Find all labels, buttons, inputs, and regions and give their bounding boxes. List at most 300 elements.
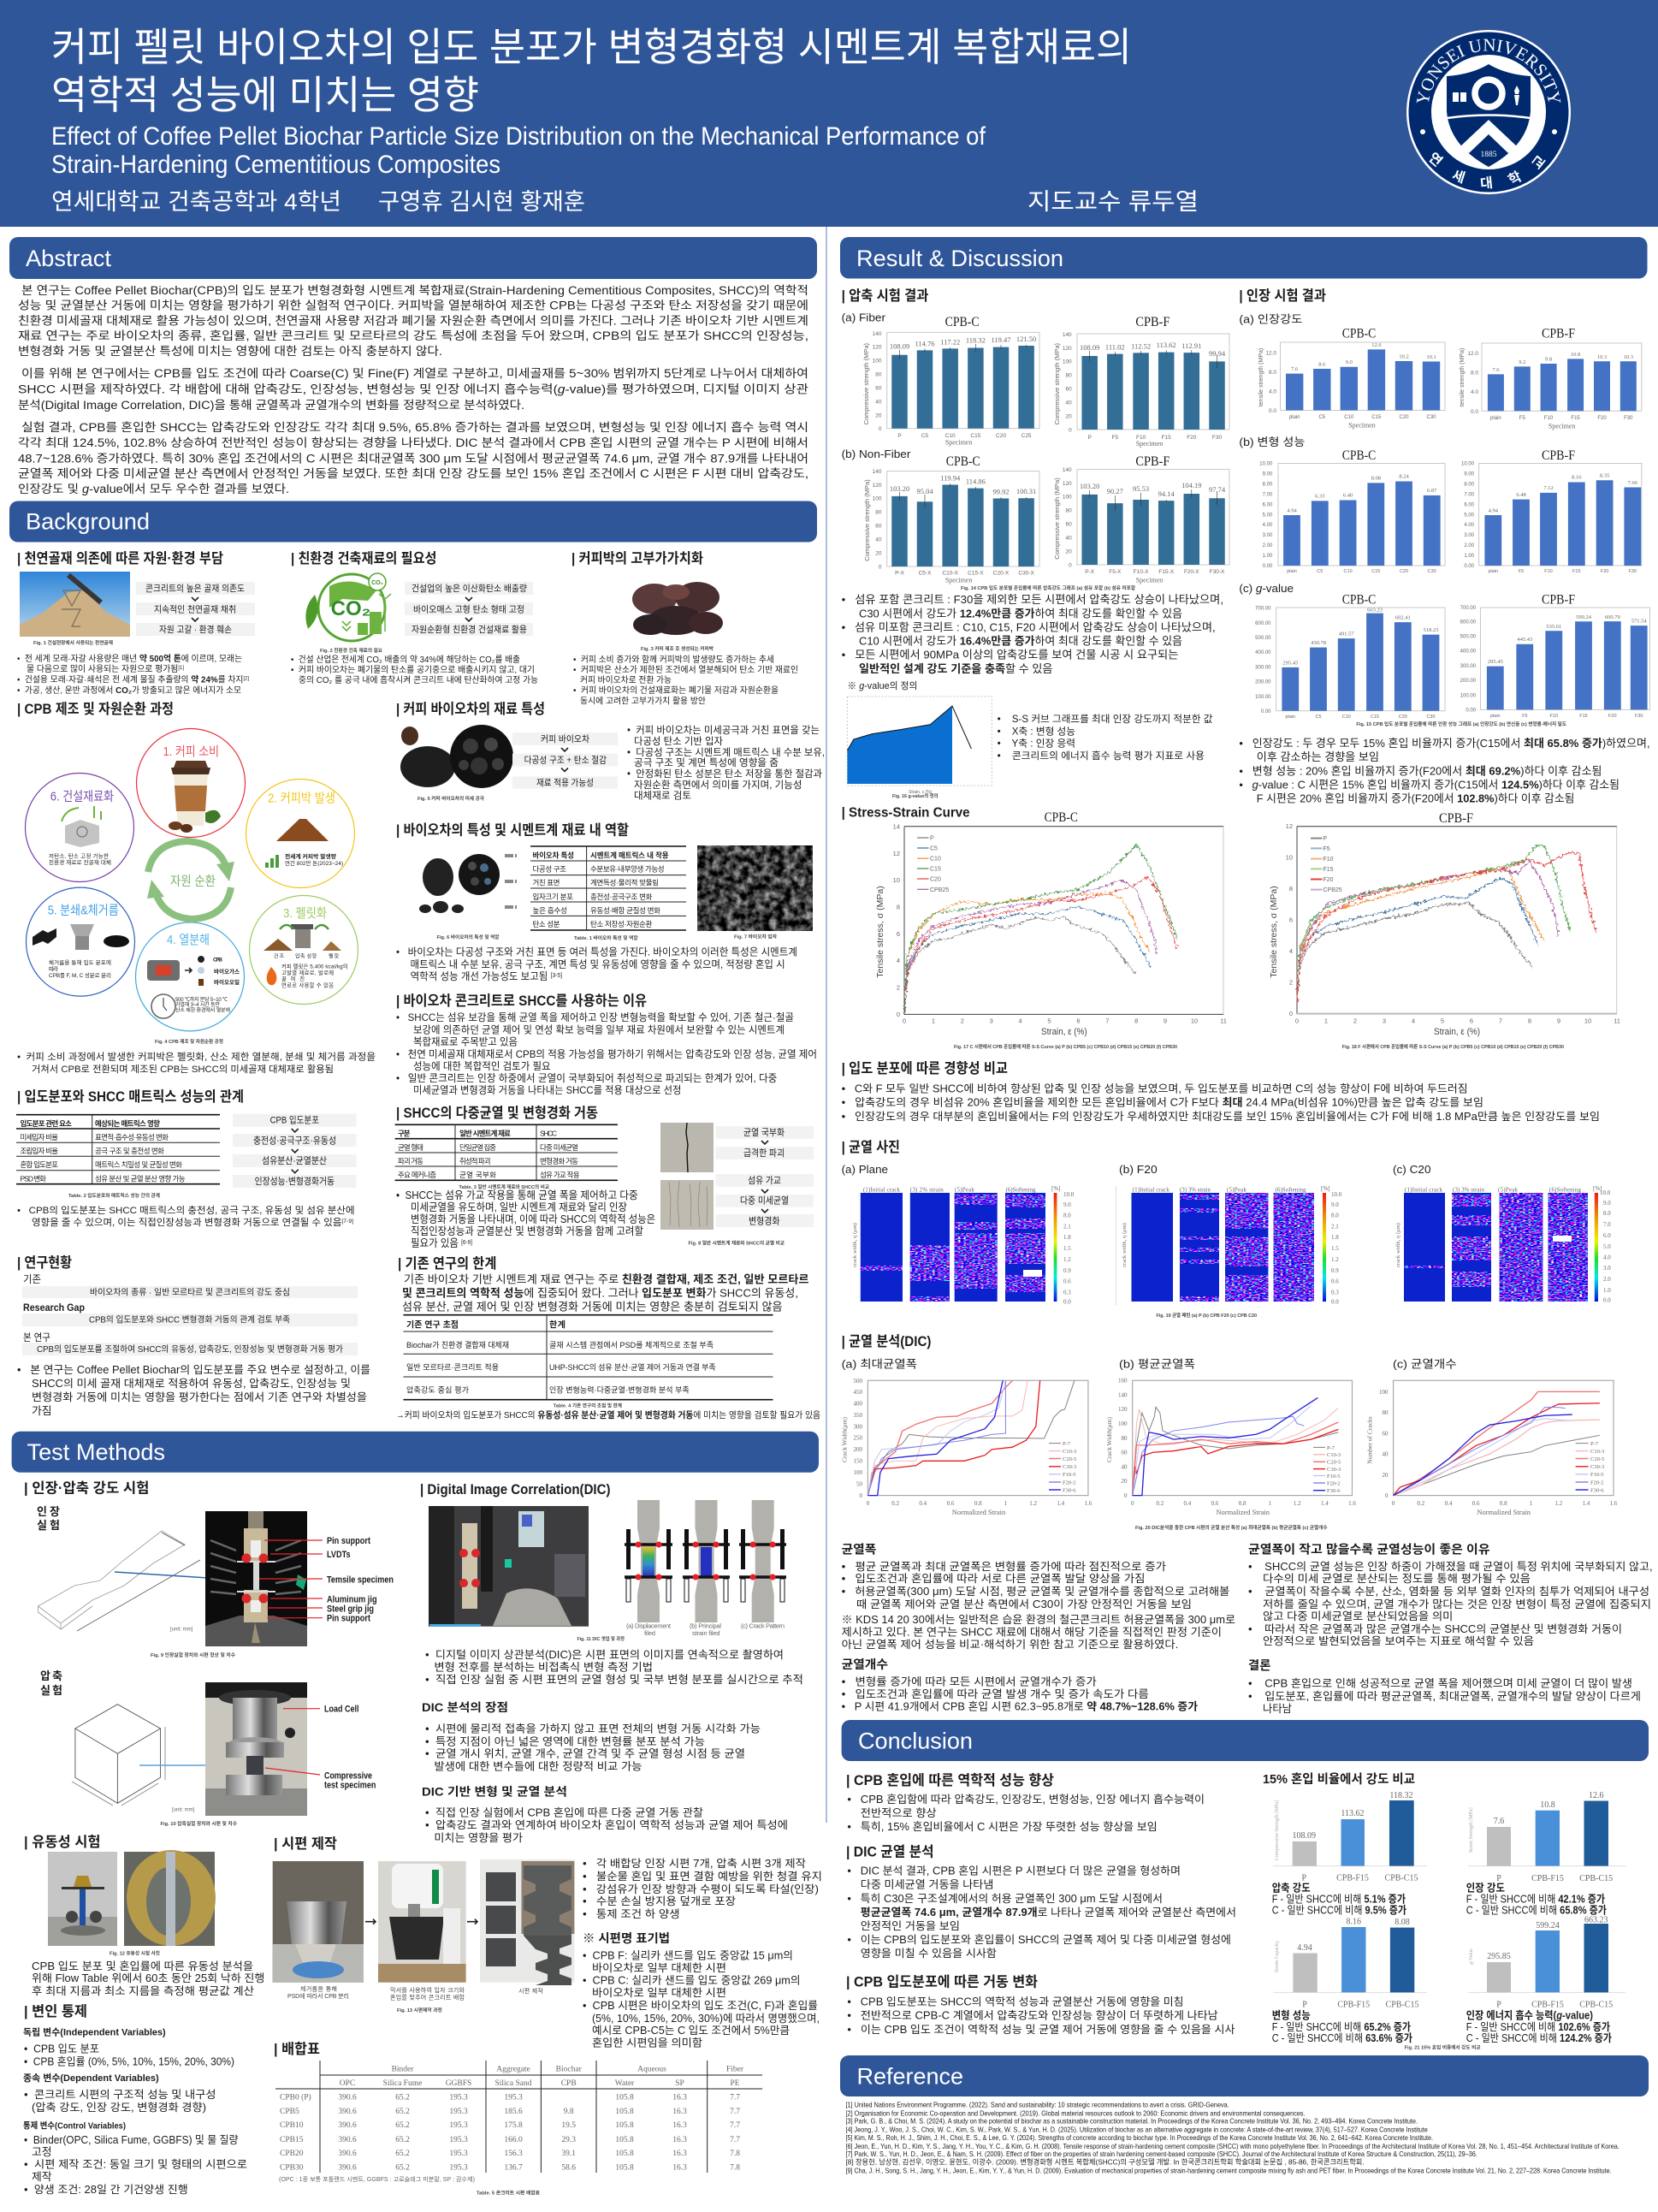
chart: mean crack width: 0.8	[1239, 1500, 1246, 1507]
chart: number of cracks: 0	[1385, 1492, 1389, 1499]
chart: g-value CPB-F: 445.43	[1517, 637, 1532, 643]
table 5: Aggregate	[496, 2066, 530, 2074]
bullets: • C와 F 모두 일반 SHCC에 비하여 향상된 압축 및 인장 성능을 보였으며, 두 입도분포를 비교하면 C의 성능 향상이 F에 비하여 두드러짐	[842, 1083, 1468, 1095]
heading: | 압축 시험 결과	[842, 288, 928, 304]
chart: non-fiber CPB-F: 120	[1063, 481, 1072, 487]
bullets: 변형 전후를 분석하는 비접촉식 변형 측정 기법	[434, 1662, 653, 1674]
panel: mix table	[274, 2041, 762, 2196]
bullets	[396, 1189, 655, 1249]
panel: conclusion text: 영향을 미칠 수 있음을 시사함	[861, 1948, 998, 1960]
chart: g-value CPB-C: 100.00	[1255, 695, 1271, 700]
reference list: [1] United Nations Environment Programme. (2022). Sand and sustainability: 10 strategic recommendations to avert a crisis. GRID-Geneva.	[845, 2101, 1229, 2109]
chart: fiber CPB-C: 108.09	[890, 342, 909, 351]
panel: SHCC multiple cracking	[395, 1105, 814, 1249]
axis ticks: 7	[1105, 1017, 1109, 1025]
chart: fiber CPB-F: 0	[1069, 427, 1072, 433]
table 3: SHCC	[540, 1130, 557, 1138]
chart: g-value CPB-C: 295.45	[1282, 661, 1298, 666]
crack map: F20: (6)Softening	[1275, 1186, 1306, 1193]
chart: tensile: 12.6	[1589, 1791, 1603, 1800]
chart: max crack width: 0	[867, 1500, 870, 1507]
step 6 construction material: 저탄소, 탄소 고정 가능한	[49, 852, 109, 859]
chart: tensile strength CPB-C: C30	[1426, 415, 1436, 420]
panel: conclusion text: | CPB 입도분포에 따른 거동 변화	[846, 1973, 1038, 1990]
title english: Effect of Coffee Pellet Biochar Particle Size Distribution on the Mechanical Performance of	[51, 122, 986, 151]
chart: g-value: g-Value	[1469, 1948, 1474, 1965]
label compression	[40, 1669, 62, 1697]
text block: number of cracks: • 변형률 증가에 따라 모든 시편에서 균열개수가 증가	[842, 1675, 1097, 1687]
step 3 pelletizing: 연료로 사용할 수 있음	[281, 981, 334, 989]
heading: | 입도분포와 SHCC 매트릭스 성능의 관계	[17, 1088, 244, 1105]
panel: natural aggregate dependence	[17, 550, 255, 696]
chart: strain capacity CPB-F: 4.00	[1464, 523, 1475, 528]
chart: g-value CPB-F: 535.61	[1546, 624, 1561, 630]
table 4: Biochar가 친환경 결합재 대체재	[406, 1340, 509, 1349]
chart: fiber CPB-C: 20	[875, 412, 882, 418]
crack map: F20: 1.2	[1331, 1256, 1339, 1263]
panel: compression results: Fig. 14 CPB 입도 분포별 혼입률에 따른 압축강도 그래프 (a) 섬유 포함 (b) 섬유 미포함	[961, 584, 1135, 591]
chart: mean crack width: 100	[1118, 1420, 1128, 1427]
chart: non-fiber CPB-C: CPB-C	[946, 454, 980, 469]
table 5: CPB0 (P)	[280, 2093, 311, 2102]
chart: number of cracks: 20	[1383, 1472, 1389, 1479]
bullets: • 안정화된 탄소 성분은 탄소 저장을 통한 절감과	[627, 768, 822, 780]
abstract text: 본 연구는 Coffee Pellet Biochar(CPB)의 입도 분포가 변형경화형 시멘트계 복합재료(Strain-Hardening Cementitious Composites, SHCC)의 역학적	[21, 284, 808, 297]
chart: fiber CPB-F: 108.09	[1080, 343, 1099, 352]
reference list: [3] Park, G. B., & Choi, M. S. (2024). A study on the potential of biochar as a sustainable construction material. In Proceedings of the Korea Concrete Institute Vol. 36, No. 2, 493–494. Korea Concrete Institute.	[845, 2117, 1418, 2126]
chart: number of cracks: Number of Cracks	[1365, 1416, 1374, 1464]
legend: C10-3	[1327, 1452, 1341, 1458]
panel: coffee grounds upcycling	[571, 550, 798, 707]
chart: strain capacity: 4.94	[1297, 1943, 1312, 1953]
chart: g-value CPB-F: plain	[1490, 714, 1501, 719]
crack map: plane: (5)Peak	[955, 1186, 975, 1193]
photo: compression test setup	[205, 1682, 307, 1816]
bullets: • 커피 소비 증가와 함께 커피박의 발생량도 증가하는 추세	[573, 654, 774, 665]
label tensile: 실험	[37, 1519, 60, 1532]
chart: stress strain CPB-C: CPB-C	[1045, 810, 1078, 825]
chart: stress strain CPB-F: CPB-F	[1439, 811, 1473, 826]
authors: 구영휴 김시현 황재훈	[378, 189, 585, 215]
chart: tensile: 10.8	[1540, 1800, 1555, 1810]
label tensile: 인장	[37, 1505, 60, 1518]
header banner	[0, 0, 1658, 227]
table 5: 105.8	[615, 2163, 634, 2172]
chart: strain capacity CPB-C: 6.40	[1343, 493, 1353, 498]
bullets: 공극 구조 및 계면 특성에 영향을 줌	[634, 757, 779, 768]
chart: max crack width	[840, 1378, 1093, 1516]
chart: strain capacity CPB-F: F15	[1572, 569, 1581, 574]
bullets	[17, 1205, 355, 1228]
table 1: 높은 흡수성	[532, 906, 567, 915]
panel: research status: CPB의 입도분포를 조절하여 SHCC의 유동성, 압축강도, 인장성능 및 변형경화 거동 평가	[37, 1343, 343, 1355]
crack map: F20: 2.1	[1331, 1224, 1339, 1231]
axis ticks: 7	[1499, 1017, 1502, 1025]
chart: fiber CPB-C: CPB-C	[945, 315, 980, 329]
panel: conclusion text: 전반적으로 향상	[861, 1807, 937, 1819]
chart: strain capacity CPB-F	[1461, 448, 1642, 574]
bullets: • 압축강도의 경우 비섬유 20% 혼입비율을 제외한 모든 혼입비율에서 C가 F보다 최대 24.4 MPa(비섬유 10%)만큼 높은 압축 강도를 보임	[842, 1097, 1483, 1109]
bullets: • 불순물 혼입 및 표면 결함 예방을 위한 청결 유지	[583, 1871, 822, 1883]
chart: mean crack width: 1	[1268, 1500, 1271, 1507]
chart: fiber CPB-C: Compressive strength (MPa)	[862, 342, 870, 424]
axis ticks	[1286, 822, 1620, 1025]
chart: strain capacity CPB-F: F5	[1519, 569, 1524, 574]
chart: strain capacity CPB-F: 0.00	[1464, 564, 1475, 569]
reference list: [8] 장용헌, 남상현, 김선우, 이영오, 윤현도, 이광수. (2009). 변형경화형 시멘트 복합체(SHCC)의 구성모델 개발. In 한국콘크리트학회 학술대회 논문집 , 85-86, 한국콘크리트학회.	[845, 2158, 1365, 2167]
crack map: C20: (6)Softening	[1549, 1186, 1581, 1193]
chart: g-value CPB-C: 491.57	[1339, 632, 1354, 637]
bullets: 자원순환 측면에서 의미를 가지며, 기능성	[634, 779, 802, 791]
chart: tensile: Strain Strength [MPa]	[1469, 1807, 1474, 1853]
axis ticks: 0	[1295, 1017, 1299, 1025]
table 5: Binder	[392, 2066, 414, 2074]
crack map: C20: (1)Initial crack	[1405, 1186, 1442, 1193]
panel: conclusion text: • 이는 CPB 입도 조건이 역학적 성능 및 균열 제어 거동에 영향을 줄 수 있음을 시사	[847, 2024, 1235, 2036]
table 5	[275, 2061, 762, 2173]
crack map: C20: 2.0	[1603, 1276, 1611, 1283]
chart: non-fiber CPB-C: 100	[873, 496, 882, 502]
chart: strain capacity CPB-C: 6.00	[1263, 502, 1273, 507]
chart: strain capacity CPB-C: 8.08	[1371, 476, 1381, 481]
crack map: F20	[1116, 1185, 1342, 1306]
text block: number of cracks: • P 시편 41.9개에서 CPB 혼입 시편 62.3~95.8개로 약 48.7%~128.6% 증가	[842, 1699, 1199, 1713]
panel: compression results: (a) Fiber	[842, 311, 886, 323]
bullets	[291, 654, 538, 685]
icon: green CO2 globe	[305, 573, 391, 641]
chart: non-fiber CPB-C: 80	[875, 510, 882, 516]
crack map: plane: 8.0	[1063, 1212, 1071, 1219]
flow chart: CPB 입도분포	[270, 1114, 319, 1126]
abstract text: 48.7~128.6% 증가하였다. 특히 30% 혼입 조건에서의 C 시편은 최대균열폭 300 μm 도달 시점에서 평균균열폭 74.6 μm, 균열 개수 87.9개를 나타내어	[18, 452, 808, 466]
legend: C10-3	[1063, 1449, 1076, 1455]
text: compression: C - 일반 SHCC에 비해 9.5% 증가	[1272, 1903, 1406, 1917]
heading: | 바이오차 콘크리트로 SHCC를 사용하는 이유	[396, 993, 647, 1009]
bullets: 미세균열을 유도하며, 일반 시멘트계 재료와 달리 인장	[411, 1201, 627, 1213]
flow chart	[512, 732, 618, 789]
panel: conclusion text: 평균균열폭 74.6 μm, 균열개수 87.9개 로 나타나 균열폭 제어와 균열분산 측면에서	[861, 1906, 1236, 1918]
chart: fiber CPB-F: F30	[1212, 435, 1222, 441]
chart: fiber CPB-F: 60	[1065, 387, 1072, 392]
chart: mean crack width: 0	[1131, 1500, 1134, 1507]
chart: tensile strength CPB-C: CPB-C	[1342, 327, 1376, 341]
text block: crack width: • 허용균열폭(300 μm) 도달 시점, 평균 균열폭 및 균열개수를 종합적으로 고려해볼	[842, 1586, 1229, 1598]
step 4 pyrolysis: 바이오가스	[214, 967, 240, 976]
tensile callouts: Pin support	[327, 1536, 370, 1546]
tensile callouts: LVDTs	[327, 1550, 351, 1560]
tensile callouts: Steel grip jig	[327, 1604, 374, 1615]
chart: number of cracks: 0.4	[1445, 1500, 1453, 1507]
panel: tension and compression test	[24, 1480, 394, 1827]
bullets: • 수분 손실 방지용 덮개로 포장	[583, 1895, 737, 1907]
chart: strain capacity CPB-C: 4.00	[1263, 523, 1273, 528]
heading: | SHCC의 다중균열 및 변형경화 거동	[396, 1105, 598, 1121]
text block: crack width: ※ KDS 14 20 30에서는 일반적은 습윤 환경의 철근콘크리트 허용균열폭을 300 μm로	[842, 1614, 1235, 1626]
chart: tensile strength CPB-F	[1460, 327, 1642, 430]
chart: fiber CPB-C: 118.32	[966, 335, 986, 344]
panel: biochar role: Table. 1 바이오차 특성 및 역할	[574, 934, 638, 941]
table 5: 58.6	[561, 2163, 576, 2172]
crack map: plane: [%]	[1051, 1185, 1061, 1192]
step 5 grinding	[26, 887, 135, 996]
panel: coffee grounds upcycling: Fig. 3 커피 제조 후 생성되는 커피박	[641, 645, 714, 652]
bullets: • SHCC는 섬유 보강을 통해 균열 폭을 제어하고 인장 변형능력을 확보할 수 있어, 기존 철근·철골	[396, 1011, 794, 1023]
chart: max crack width: 500	[854, 1378, 862, 1385]
chart: g-value: P	[1496, 2001, 1501, 2009]
chart: max crack width: 400	[854, 1400, 862, 1407]
chart: compression: P	[1302, 1874, 1307, 1883]
reference list: [5] Kim, M. S., Roh, H. J., Shim, J. H., Choi, E. S., & Lee, G. Y. (2024). Strengths of concrete according to biochar type. In Proceedings of the Korea Concrete Institute Vol. 36, No. 2, 641–642. Korea Concrete Institute.	[845, 2133, 1433, 2142]
chart: number of cracks: 1.4	[1583, 1500, 1590, 1507]
chart: tensile strength CPB-C: 9.0	[1346, 359, 1353, 365]
step 5 grinding: 따라	[49, 965, 58, 972]
chart: max crack width: Crack Width(μm)	[840, 1417, 849, 1462]
crack map: C20: [%]	[1593, 1185, 1602, 1192]
step 1 coffee consumption: 1. 커피 소비	[163, 744, 219, 759]
chart: strain capacity CPB-C: 10.00	[1259, 462, 1273, 467]
chart: fiber CPB-F: 112.52	[1131, 341, 1151, 350]
chart: g-value CPB-F: F10	[1550, 714, 1558, 719]
chart: fiber CPB-C	[862, 315, 1039, 447]
panel: biochar material properties	[396, 701, 825, 802]
chart: mean crack width	[1105, 1378, 1356, 1516]
chart: max crack width: 1.2	[1029, 1500, 1037, 1507]
panel: variable control: 통제 변수(Control Variables)	[23, 2120, 126, 2131]
table 1: 충전성·공극구조 변화	[590, 893, 653, 901]
panel: variable control: • 시편 제작 조건: 동일 크기 및 형태의 시편으로	[24, 2158, 247, 2170]
chart: max crack width: 450	[854, 1389, 862, 1396]
bullets: 매트릭스 내 수분 보유, 공극 구조, 계면 특성 및 유동성에 영향을 줄 수 있으며, 적정량 혼입 시	[411, 958, 785, 970]
panel: crack photos: Fig. 19 균열 패턴 (a) P (b) CPB F20 (c) CPB C20	[1157, 1312, 1257, 1319]
chart: mean crack width: 0	[1124, 1492, 1128, 1499]
chart: max crack width: 0.6	[947, 1500, 955, 1507]
abstract text	[18, 284, 808, 495]
step 3 pelletizing	[250, 895, 358, 1005]
panel: 15 percent comparison	[1263, 1772, 1625, 2050]
chart: strain capacity: Strain Capacity	[1275, 1941, 1280, 1972]
panel: limits of prior research: Table. 4 기존 연구의 초점 및 한계	[554, 1402, 622, 1408]
heading: | 연구현황	[17, 1254, 72, 1271]
chart: stress strain CPB-C: Tensile stress, σ (MPa)	[875, 886, 885, 978]
table 2: 매트릭스 치밀성 및 균질성 변화	[95, 1160, 182, 1169]
axis ticks: 6	[1470, 1017, 1473, 1025]
panel: crack analysis DIC	[840, 1333, 1618, 1531]
bullets: SHCC의 미세 골재 대체재로 적용하여 유동성, 압축강도, 인장성능 및	[32, 1378, 351, 1390]
abstract text: 인장강도 및 g-value에서 모두 우수한 결과를 보였다.	[18, 483, 289, 495]
photo captions: 시편 제작	[518, 1987, 544, 1995]
table 5: 7.8	[730, 2150, 740, 2158]
table 1: 다공성 구조	[532, 865, 566, 874]
chart: compression: 108.09	[1293, 1831, 1316, 1841]
panel: limits of prior research	[396, 1255, 820, 1420]
text block: why small cracks are better: 균열폭이 작고 많을수록 균열성능이 좋은 이유	[1248, 1542, 1490, 1556]
panel: flow test: Fig. 12 유동성 시험 사진	[110, 1949, 160, 1956]
chart: fiber CPB-C: 80	[875, 371, 882, 378]
chart: tensile strength CPB-F: F5	[1519, 416, 1525, 421]
heading: | 바이오차의 특성 및 시멘트계 재료 내 역할	[396, 821, 629, 839]
text block: crack conclusion: • CPB 혼입으로 인해 성공적으로 균열 폭을 제어했으며 미세 균열이 더 많이 발생	[1248, 1677, 1632, 1689]
section bar: Conclusion	[842, 1720, 1649, 1761]
table 3: 섬유 가교 작용	[540, 1171, 580, 1179]
chart: tensile: CPB-C15	[1579, 1874, 1613, 1883]
flow chart: 지속적인 천연골재 채취	[154, 604, 236, 614]
section bar: Result and Discussion	[840, 237, 1648, 279]
axis ticks: 4	[897, 957, 900, 964]
bullets: C10 시편에서 강도가 16.4%만큼 증가하여 최대 강도를 확인할 수 있음	[859, 635, 1182, 647]
panel: crack photos	[842, 1139, 1611, 1319]
chart: strain capacity CPB-C: 0.00	[1263, 564, 1273, 569]
chart: fiber CPB-C: 120	[873, 345, 882, 351]
text block: number of cracks: • 입도조건과 혼입률에 따라 균열 발생 개수 및 증가 속도가 다름	[842, 1688, 1149, 1700]
chart: max crack width: Normalized Strain	[952, 1508, 1006, 1516]
chart: fiber CPB-C: C10	[945, 433, 956, 439]
table 5: 19.5	[561, 2121, 576, 2130]
panel: conclusion text: • 특히, 15% 혼입비율에서 C 시편은 가장 뚜렷한 성능 향상을 보임	[847, 1821, 1158, 1833]
bullets naming: 바이오차로 일부 대체한 시편	[592, 1962, 726, 1974]
flow chart: 다중 미세균열	[740, 1195, 789, 1207]
chart: g-value CPB-C: CPB-C	[1342, 592, 1376, 608]
chart: strain capacity: CPB-F15	[1337, 2001, 1370, 2009]
bullets	[842, 593, 1223, 675]
text: tensile	[1466, 1883, 1607, 1917]
text block: CPB 입도 분포 및 혼입률에 따른 유동성 분석을	[32, 1960, 253, 1972]
chart: tensile strength CPB-C: C5	[1318, 415, 1326, 420]
chart: g-value area	[847, 697, 992, 799]
chart: non-fiber CPB-F	[1053, 454, 1229, 584]
flow chart: 커피 바이오차	[541, 734, 589, 744]
text: energy absorption	[1466, 2009, 1612, 2044]
tensile callouts: Pin support	[327, 1614, 370, 1624]
tensile callouts: Temsile specimen	[327, 1574, 394, 1585]
chart: tensile strength CPB-C: 12.6	[1371, 342, 1382, 348]
table 5: CPB20	[280, 2150, 304, 2158]
heading: | 커피박의 고부가가치화	[571, 550, 703, 566]
photo: sand mound	[20, 572, 130, 637]
crack map: C20	[1395, 1185, 1611, 1304]
table 5: 390.6	[338, 2108, 357, 2116]
section bar: Conclusion: Conclusion	[858, 1729, 973, 1754]
table 5: 136.7	[504, 2163, 523, 2172]
bullets: [6-9]	[461, 1240, 472, 1246]
chart: tensile strength CPB-C: 8.6	[1318, 361, 1326, 368]
legend: C30-3	[1590, 1464, 1604, 1470]
reference list	[845, 2101, 1620, 2175]
chart: g-value CPB-F	[1460, 592, 1649, 719]
panel: research status: 본 연구	[23, 1331, 50, 1343]
chart: mean crack width: 160	[1118, 1378, 1128, 1385]
bullets: 대체재로 검토	[634, 791, 691, 802]
table 5: 166.0	[504, 2136, 523, 2144]
flow chart: 건설업의 높은 이산화탄소 배출량	[412, 583, 527, 594]
text: strain capacity: C - 일반 SHCC에 비해 63.6% 증가	[1272, 2031, 1412, 2044]
chart: mean crack width: 0.6	[1211, 1500, 1219, 1507]
legend: P-7	[1590, 1441, 1599, 1447]
panel: specimen fabrication: Fig. 13 시편제작 과정	[397, 2007, 442, 2013]
section bar: Test Methods: Test Methods	[27, 1439, 165, 1465]
legend: C20	[930, 876, 941, 883]
bullets: 다공성 탄소 기반 입자	[634, 736, 723, 747]
chart: non-fiber CPB-C: 140	[873, 469, 882, 475]
chart: g-value CPB-C: C10	[1342, 715, 1351, 720]
step 6 construction material: 친환경 재료로 잔골재 대체	[49, 858, 111, 866]
bullets	[998, 714, 1213, 762]
chart: g-value CPB-F: F5	[1522, 714, 1528, 719]
table 5: 16.3	[672, 2121, 687, 2130]
table 4: 압축강도 중심 평가	[406, 1385, 469, 1394]
step 4 pyrolysis: 바이오오일	[214, 978, 240, 986]
bullets: 복합재료로 주목받고 있음	[413, 1035, 518, 1047]
table 5: CPB15	[280, 2136, 304, 2144]
legend: C30-3	[1327, 1467, 1341, 1473]
bullets: • 커피 바이오차의 건설재료화는 폐기물 저감과 자원순환을	[573, 685, 779, 696]
panel: research status: Research Gap	[23, 1302, 85, 1314]
panel: biochar role: Fig. 7 바이오차 입자	[734, 933, 777, 940]
text block	[402, 1273, 809, 1313]
chart: strain capacity CPB-C: 6.87	[1427, 488, 1437, 494]
table 2: 표면적·흡수성·유동성 변화	[95, 1133, 169, 1142]
bullets: 변형경화 거동을 나타내며, 이에 따라 SHCC의 역학적 성능은	[411, 1213, 655, 1225]
crack map: F20: 10.0	[1331, 1191, 1342, 1198]
axis ticks: 4	[1289, 947, 1293, 955]
table 2: 미세입자 비율	[21, 1133, 58, 1142]
chart: non-fiber CPB-C: 114.86	[966, 477, 986, 486]
crack map: plane: 2.1	[1063, 1224, 1071, 1231]
label tensile	[37, 1505, 60, 1532]
chart: max crack width: 0	[859, 1492, 862, 1499]
legend	[1576, 1441, 1604, 1494]
subheading: DIC 분석의 장점	[422, 1701, 508, 1714]
legend: F20-2	[1063, 1480, 1076, 1486]
heading: | Stress-Strain Curve	[842, 806, 970, 820]
chart: g-value CPB-F: CPB-F	[1542, 592, 1575, 608]
panel: eco-friendly materials: Fig. 2 친환경 건축 재료의 필요	[320, 647, 382, 654]
legend: P-7	[1063, 1441, 1071, 1447]
panel: tension and compression test: Fig. 9 인장실험 장치와 시편 형상 및 치수	[151, 1652, 235, 1658]
axis ticks: 1	[932, 1017, 935, 1025]
chart: max crack width: 0.4	[919, 1500, 927, 1507]
chart: non-fiber CPB-C: 119.94	[940, 474, 961, 483]
chart: strain capacity: P	[1302, 2001, 1307, 2009]
axis ticks: 1	[1324, 1017, 1328, 1025]
text block: crack width: 아닌 균열폭 제어 성능을 비교·해석하기 위한 참고 기준으로 활용하였다.	[842, 1639, 1178, 1651]
table 5: 195.3	[504, 2093, 523, 2102]
chart: fiber CPB-C: 119.47	[991, 335, 1011, 344]
bullets: • 통제 조건 하 양생	[583, 1908, 680, 1920]
chart: stress strain CPB-C	[875, 810, 1227, 1037]
step 2 coffee grounds	[246, 779, 354, 888]
chart: g-value CPB-F: 295.45	[1488, 659, 1503, 665]
bullets	[425, 1723, 761, 1773]
panel: flow test	[24, 1834, 264, 1997]
table 5: 16.3	[672, 2136, 687, 2144]
table 5: CPB	[561, 2079, 577, 2088]
bullets: • 직접 인장 실험에서 CPB 혼입에 따른 다중 균열 거동 관찰	[425, 1807, 704, 1819]
chart: mean crack width: Normalized Strain	[1216, 1508, 1270, 1516]
chart: max crack width: 300	[854, 1423, 862, 1430]
table 5: 65.2	[395, 2136, 410, 2144]
panel: variable control: 종속 변수(Dependent Variables)	[23, 2073, 159, 2084]
panel: specimen fabrication	[273, 1835, 822, 2049]
step 3 pelletizing: 건조	[274, 953, 284, 960]
crack map: C20: (5)Peak	[1498, 1186, 1518, 1193]
chart: strain capacity CPB-F: 8.00	[1464, 482, 1475, 487]
chart: tensile: CPB-F15	[1531, 1874, 1564, 1883]
section bar: Reference: Reference	[857, 2064, 963, 2090]
chart: tensile strength CPB-F: tensile strength (MPa)	[1460, 348, 1466, 406]
bullets: [1]	[178, 666, 184, 671]
image: biochar pile and pores	[400, 725, 513, 788]
crack map: C20: 0.0	[1603, 1297, 1611, 1304]
